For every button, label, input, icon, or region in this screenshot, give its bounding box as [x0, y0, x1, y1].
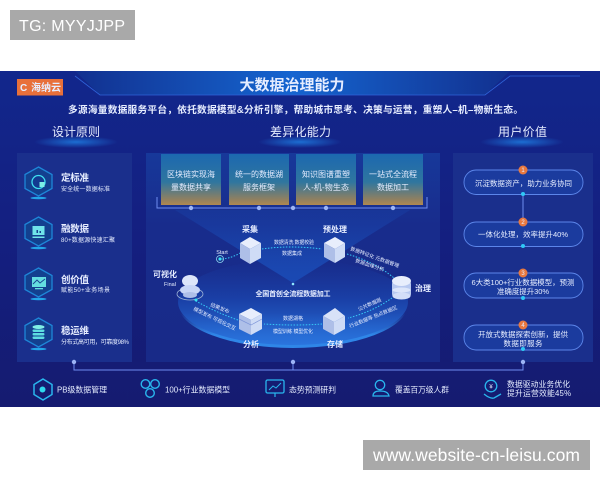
watermark: bottom right [363, 440, 590, 470]
logo: C [20, 83, 27, 94]
card: blockchain: 量数据共享 [171, 182, 211, 192]
item: data fusion: 融数据 [61, 223, 89, 235]
card: knowledge graph: 知识图谱重塑 [302, 169, 350, 179]
label: start: Start [216, 250, 228, 256]
item: standards: 安全统一数据标准 [61, 185, 110, 193]
label: visualization [153, 269, 177, 288]
process diagram [153, 210, 431, 349]
card: data lake: 统一的数据湖 [235, 169, 283, 179]
flow labels: governance to storage: 公共数据层 [357, 296, 383, 313]
feature: million users: 覆盖百万级人群 [395, 384, 449, 394]
item: create value [25, 268, 110, 300]
value 3 [464, 268, 583, 300]
item: create value: 赋能50+业务场景 [61, 286, 110, 294]
icon: governance database [392, 276, 411, 300]
card: data lake [229, 154, 289, 205]
heading: user value: 用户价值 [498, 124, 547, 139]
flow labels: preprocess to governance: 数据特征化 元数据管理 [349, 245, 400, 269]
card: one stop: 一站式全流程 [369, 169, 417, 179]
panel: design principles [17, 153, 132, 362]
flow labels: analysis to visualization: 模型发布 可视化交互 [192, 306, 237, 332]
icon: storage box [323, 308, 345, 335]
value 2: 2 [521, 220, 525, 226]
value 1: 1 [521, 168, 525, 174]
feature: million users [373, 380, 449, 396]
item: standards [25, 167, 110, 199]
icon: preprocessing cube [324, 237, 345, 263]
value 4 [464, 320, 583, 351]
logo: 海纳云 [31, 81, 61, 94]
card: blockchain [161, 154, 221, 205]
value 4: 开放式数据探索创新，提供 [478, 329, 568, 339]
feature: PB data management [34, 379, 107, 400]
card: one stop [363, 154, 423, 205]
heading: user value [480, 124, 564, 148]
subtitle: 多源海量数据服务平台，依托数据模型&分析引擎，帮助城市思考、决策与运营，重塑人–机–物新生态。 [68, 103, 523, 116]
label: visualization: 可视化 [153, 269, 177, 279]
title band [75, 71, 580, 95]
label: start [216, 250, 228, 262]
flow labels: analysis to visualization: 结果发布 [209, 301, 230, 315]
item: stable operations: 稳运维 [61, 325, 89, 337]
feature: business optimization: 提升运营效能45% [507, 388, 571, 398]
label: analysis: 分析 [243, 339, 259, 349]
feature: business optimization [484, 379, 571, 398]
watermark: bottom right: www.website-cn-leisu.com [372, 445, 580, 465]
title: 大数据治理能力 [240, 76, 344, 94]
flow labels: collection to preprocess [274, 239, 314, 257]
flow labels: preprocess to governance: 数据血缘分析 [354, 257, 385, 273]
heading: differentiated capabilities: 差异化能力 [270, 125, 331, 139]
feature: PB data management: PB级数据管理 [57, 384, 107, 394]
platform disk [175, 210, 410, 348]
card: knowledge graph: 人-机-物生态 [303, 182, 349, 192]
value 4: 4 [521, 323, 525, 329]
item: stable operations [25, 318, 130, 350]
icon: collection server [240, 237, 261, 264]
flow labels: storage to analysis: 模型训练 模型优化 [273, 328, 313, 335]
item: create value: 创价值 [61, 274, 89, 286]
feature: business optimization: 数据驱动业务优化 [507, 379, 570, 389]
value 3: 准确度提升30% [497, 286, 549, 296]
card: one stop: 数据加工 [377, 182, 409, 192]
heading: differentiated capabilities [258, 125, 342, 148]
card: knowledge graph [296, 154, 356, 205]
value 3: 6大类100+行业数据模型，预测 [472, 277, 574, 287]
card: data lake: 服务框架 [243, 182, 275, 192]
bottom connector [72, 360, 525, 370]
heading: design principles: 设计原则 [52, 125, 100, 139]
main banner background [0, 71, 600, 407]
value 1 [464, 166, 583, 196]
feature: business optimization: ¥ [489, 384, 493, 390]
value 2: 一体化处理，效率提升40% [478, 229, 568, 239]
feature: trend forecast [266, 380, 336, 397]
watermark: top left [10, 10, 135, 40]
value 4: 数据即服务 [504, 338, 543, 348]
panel: differentiated capabilities [146, 153, 440, 362]
label: preprocessing: 预处理 [323, 224, 347, 234]
icon: analysis stack [239, 308, 262, 335]
infographic banner [0, 71, 600, 407]
flow labels: storage to analysis: 数据湖格 [283, 315, 303, 322]
flow labels: collection to preprocess: 数据集成 [282, 250, 302, 257]
item: data fusion: 80+数据源快速汇聚 [61, 236, 115, 244]
panel: user value [453, 153, 593, 362]
flow path [196, 247, 394, 325]
feature: industry models: 100+行业数据模型 [165, 384, 230, 394]
flow labels: governance to storage: 行业数据等 热点数据区 [348, 304, 398, 330]
bracket connector [157, 197, 427, 210]
icon: visualization globe [177, 275, 203, 302]
label: storage: 存储 [327, 339, 343, 349]
connector lines [522, 194, 524, 222]
center caption: 全国首创全流程数据加工 [256, 289, 330, 298]
item: stable operations: 分布式高可用，可靠度98% [61, 338, 130, 346]
item: data fusion [25, 217, 115, 249]
label: visualization: Final [164, 282, 176, 288]
logo [17, 79, 63, 96]
watermark: top left: TG: MYYJJPP [19, 18, 125, 35]
heading: design principles [34, 125, 118, 148]
flow labels: collection to preprocess: 数据清洗 数据校验 [274, 239, 314, 246]
feature: industry models [141, 380, 230, 397]
label: collection: 采集 [242, 224, 258, 234]
value 2 [464, 218, 583, 248]
value 1: 沉淀数据资产，助力业务协同 [475, 178, 572, 188]
feature: trend forecast: 态势预测研判 [289, 384, 336, 394]
card: blockchain: 区块链实现海 [167, 169, 215, 179]
label: governance: 治理 [415, 283, 431, 293]
value 3: 3 [521, 271, 525, 277]
item: standards: 定标准 [61, 172, 89, 184]
flow labels: storage to analysis [273, 315, 313, 335]
